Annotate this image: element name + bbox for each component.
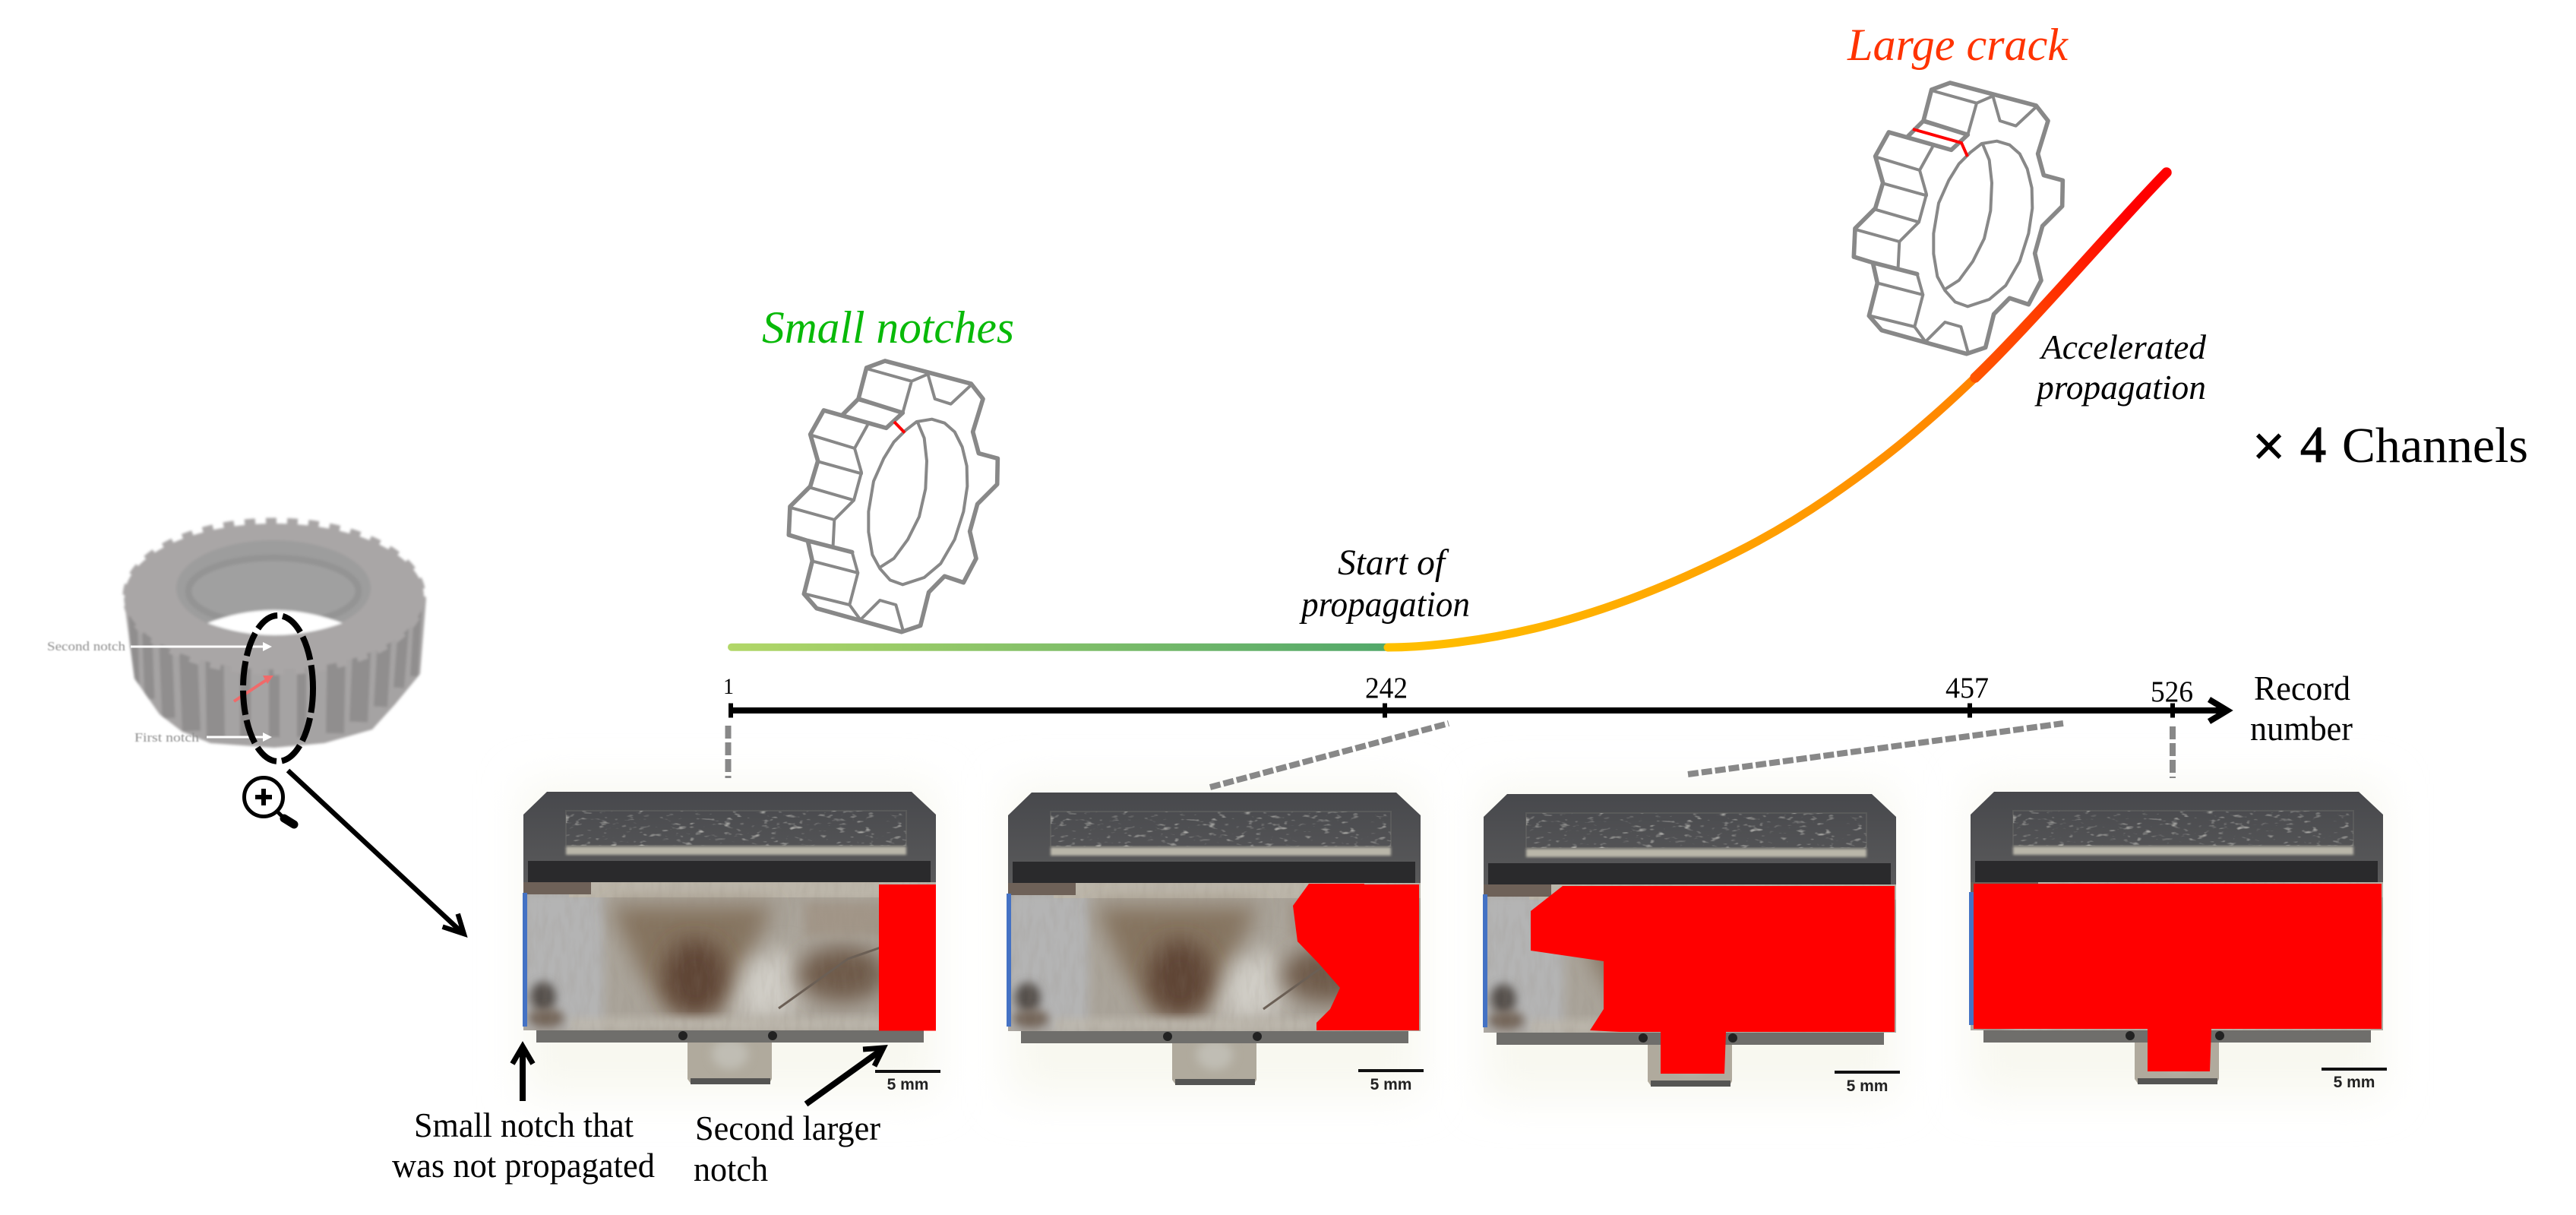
label: accelerated propagation <box>2034 328 2207 407</box>
label: first notch: First notch <box>134 730 200 745</box>
arrow: small notch <box>512 1046 533 1101</box>
label: second larger notch: Second larger <box>695 1109 880 1147</box>
label: times 4 channels: × <box>2252 413 2287 480</box>
scale bar: 5 mm <box>887 1076 928 1093</box>
tick labels: 526 <box>2151 676 2193 708</box>
label: small notch not propagated <box>392 1106 655 1185</box>
red crack area <box>1974 884 2382 1071</box>
scale bar <box>2322 1068 2387 1091</box>
scale bar <box>875 1070 940 1093</box>
label: accelerated propagation: Accelerated <box>2039 328 2207 366</box>
arrow: first notch pointer <box>207 732 272 742</box>
specimen 4 <box>1969 784 2387 1096</box>
arrow: red crack direction <box>234 676 273 701</box>
axis: record number <box>723 669 2353 748</box>
axis title <box>2250 669 2353 748</box>
label: second notch: Second notch <box>47 639 126 653</box>
icon: magnifier <box>245 778 294 824</box>
specimen 3 <box>1483 786 1900 1098</box>
label: small notch not propagated: was not propagated <box>392 1147 655 1185</box>
label: start of propagation <box>1299 543 1470 625</box>
red crack area <box>1531 886 1895 1074</box>
curve: red accelerated stage <box>1975 172 2167 378</box>
label: start of propagation: Start of <box>1338 543 1449 583</box>
label: small notch not propagated: Small notch that <box>414 1106 634 1144</box>
tick labels <box>723 672 2193 708</box>
dashed ellipse: zoomed region <box>243 615 313 761</box>
tick labels: 242 <box>1365 672 1408 704</box>
crack: large <box>1913 129 1968 157</box>
icon: gear with small notch <box>789 361 997 632</box>
scale bar: 5 mm <box>1847 1077 1888 1095</box>
arrow: second larger notch <box>806 1048 883 1104</box>
arrow: gear to specimen <box>288 770 464 934</box>
tick labels: 1 <box>723 674 734 699</box>
degradation curve <box>732 172 2167 647</box>
scale bar: 5 mm <box>2334 1074 2375 1091</box>
dashed leaders: timeline to specimens <box>728 723 2173 787</box>
title: large crack: Large crack <box>1847 20 2069 70</box>
label: second larger notch: notch <box>694 1150 768 1188</box>
blue small notch marker <box>523 893 527 1027</box>
blue small notch marker <box>1483 894 1487 1027</box>
icon: gear with large crack <box>1854 83 2062 354</box>
label: start of propagation: propagation <box>1299 584 1470 625</box>
label: times 4 channels <box>2252 413 2528 480</box>
title: small notches: Small notches <box>762 302 1014 353</box>
blue small notch marker <box>1007 894 1011 1027</box>
label: accelerated propagation: propagation <box>2034 369 2206 407</box>
curve: orange propagation stage <box>1388 378 1975 647</box>
arrow head <box>2209 699 2227 722</box>
photo: gear with notches <box>47 521 426 748</box>
red crack area <box>879 884 936 1030</box>
tick labels: 457 <box>1945 672 1989 704</box>
scale bar: 5 mm <box>1370 1076 1411 1093</box>
ticks <box>729 704 2175 717</box>
red crack area <box>1293 884 1419 1030</box>
axis title: Record <box>2254 669 2350 707</box>
crack: small notch <box>894 422 905 433</box>
scale bar <box>1835 1071 1900 1095</box>
blue small notch marker <box>1969 892 1974 1025</box>
label: times 4 channels: 4 <box>2300 416 2326 473</box>
axis title: number <box>2250 709 2353 748</box>
specimen 2 <box>1007 785 1424 1096</box>
label: second larger notch <box>694 1109 880 1188</box>
label: times 4 channels: Channels <box>2342 418 2528 473</box>
arrow: second notch pointer <box>131 642 272 651</box>
scale bar <box>1358 1069 1424 1093</box>
curve: green stable stage <box>732 644 1387 651</box>
specimen 1 <box>523 784 940 1096</box>
